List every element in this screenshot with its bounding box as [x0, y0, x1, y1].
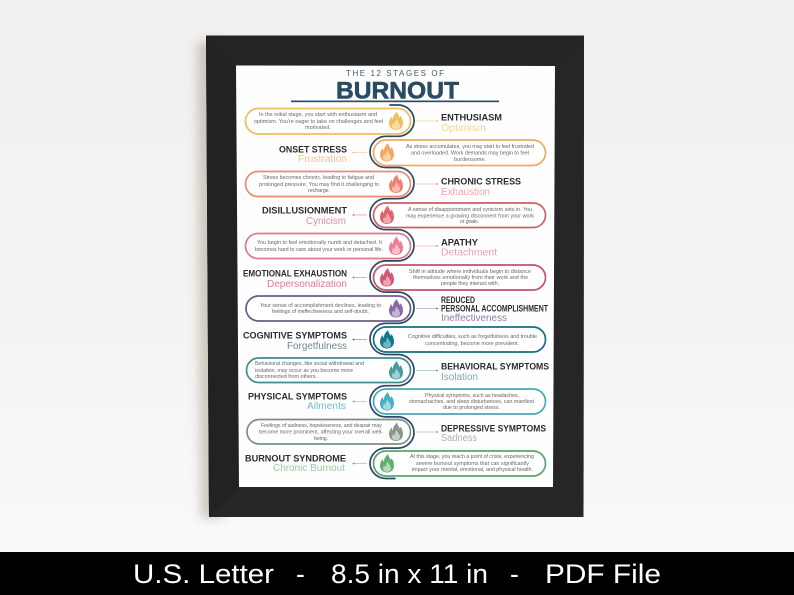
stage 4 pill: or goals.	[460, 219, 479, 225]
serpentine dark connector line	[370, 105, 414, 478]
banner text: dimensions: 8.5 in x 11 in	[331, 559, 488, 589]
stage 2 pill: and overloaded. Work demands may begin to feel	[411, 150, 529, 156]
label: onset stress	[279, 144, 347, 165]
stage 6 pill: themselves emotionally from their work and the	[413, 275, 528, 281]
frame shadow	[197, 42, 225, 518]
stage 5 pill	[246, 234, 410, 258]
stage 10 pill	[374, 389, 546, 414]
label: physical symptoms: Ailments	[307, 401, 346, 412]
stage 12 pill	[374, 451, 546, 476]
banner separator: -	[296, 559, 305, 589]
label: burnout syndrome: BURNOUT SYNDROME	[245, 453, 346, 463]
stage 1 pill: motivated.	[305, 125, 331, 131]
stage 5 pill: becomes hard to care about your work or personal life.	[255, 247, 383, 253]
label: burnout syndrome: Chronic Burnout	[273, 463, 345, 474]
stage 6 pill: people they interact with.	[441, 281, 499, 287]
label: chronic stress: CHRONIC STRESS	[441, 176, 521, 186]
stage 7 pill: feelings of ineffectiveness and self-doubt.	[272, 309, 369, 315]
stage 2 pill	[374, 140, 546, 166]
stage 5 pill: You begin to feel emotionally numb and detached. It	[257, 240, 382, 246]
stage 4 pill	[374, 203, 546, 228]
stage 9 pill: Behavioral changes, like social withdrawal and	[255, 361, 364, 367]
stage 7 pill	[246, 296, 410, 321]
stage 11 pill: become more prominent, affecting your overall well-	[259, 430, 383, 436]
label: enthusiasm	[441, 112, 502, 134]
black picture frame	[206, 36, 584, 517]
label: onset stress: Frustration	[298, 154, 347, 165]
label: physical symptoms: PHYSICAL SYMPTOMS	[248, 391, 347, 401]
stage 1 pill: optimism. You're eager to take on challenges and feel	[254, 119, 383, 125]
stage 12 pill: impact your mental, emotional, and physical health.	[412, 467, 533, 473]
stage 11 pill	[247, 420, 410, 444]
label: depressive symptoms: DEPRESSIVE SYMPTOMS	[441, 423, 546, 433]
label: reduced personal accomplishment: PERSONAL ACCOMPLISHMENT	[441, 304, 548, 314]
poster sheet	[236, 66, 555, 487]
stage 6 pill: Shift in attitude where individuals begin to distance	[409, 269, 531, 275]
stage 8 pill: concentrating, become more prevalent.	[425, 341, 519, 347]
title	[291, 69, 499, 104]
stage 9 pill	[246, 358, 410, 382]
label: enthusiasm: ENTHUSIASM	[441, 112, 502, 122]
label: burnout syndrome	[245, 453, 346, 474]
stage 2 pill: As stress accumulates, you may start to feel frustrated	[406, 144, 534, 150]
stage 10 pill: stomachaches, and sleep disturbances, can manifest	[409, 399, 534, 405]
label: emotional exhaustion: Depersonalization	[267, 279, 347, 290]
stage 1 pill	[246, 108, 410, 134]
title word: burnout: BURNOUT	[336, 78, 459, 104]
label: onset stress: ONSET STRESS	[279, 144, 347, 154]
banner text: file type: PDF File	[545, 559, 661, 589]
stage 9 pill: disconnected from others.	[255, 374, 317, 380]
stage 1 pill: In the initial stage, you start with enthusiasm and	[259, 112, 377, 118]
label: disillusionment: DISILLUSIONMENT	[262, 205, 348, 215]
label: reduced personal accomplishment: Ineffectiveness	[441, 313, 507, 324]
label: cognitive symptoms	[243, 330, 347, 352]
stage labels	[243, 112, 549, 474]
stage 11 pill: being.	[314, 436, 328, 442]
label: depressive symptoms: Sadness	[441, 433, 477, 444]
stage 3 pill	[246, 172, 410, 196]
stage 12 pill: severe burnout symptoms that can significantly	[416, 461, 529, 467]
stage 11 pill: Feelings of sadness, hopelessness, and despair may	[261, 423, 382, 429]
label: disillusionment	[262, 205, 348, 227]
stage 2 pill: burdensome.	[454, 157, 486, 163]
banner separator: -	[510, 559, 519, 589]
stage 6 pill	[374, 265, 546, 290]
label: cognitive symptoms: Forgetfulness	[287, 341, 347, 352]
label: emotional exhaustion: EMOTIONAL EXHAUSTION	[243, 268, 347, 278]
label: enthusiasm: Optimism	[441, 123, 486, 134]
label: behavioral symptoms: Isolation	[441, 372, 478, 383]
stage 10 pill: due to prolonged stress.	[443, 405, 500, 411]
stage 12 pill: At this stage, you reach a point of crisis, experiencing	[410, 454, 534, 460]
connectors	[353, 120, 438, 464]
label: apathy: APATHY	[441, 237, 478, 247]
label: physical symptoms	[248, 391, 347, 412]
banner text: paper size: U.S. Letter	[133, 559, 274, 589]
label: reduced personal accomplishment: REDUCED	[441, 295, 475, 305]
stage 3 pill: Stress becomes chronic, leading to fatigue and	[263, 175, 374, 181]
label: reduced personal accomplishment	[441, 295, 548, 324]
stage 3 pill: prolonged pressure. You may find it challenging to	[259, 182, 379, 188]
bottom black banner	[0, 552, 794, 595]
label: cognitive symptoms: COGNITIVE SYMPTOMS	[243, 330, 347, 340]
stage 10 pill: Physical symptoms, such as headaches,	[425, 393, 520, 399]
label: chronic stress: Exhaustion	[441, 187, 490, 198]
stage 8 pill	[374, 327, 546, 352]
label: disillusionment: Cynicism	[306, 216, 346, 227]
label: behavioral symptoms: BEHAVIORAL SYMPTOMS	[441, 361, 549, 371]
stage 4 pill: A sense of disappointment and cynicism sets in. You	[408, 207, 532, 213]
label: behavioral symptoms	[441, 361, 549, 383]
label: apathy	[441, 237, 497, 258]
title underline	[291, 100, 499, 102]
stage 3 pill: recharge.	[308, 188, 330, 194]
label: emotional exhaustion	[243, 268, 347, 290]
pills row 1-12	[246, 108, 546, 476]
stage 9 pill: isolation, may occur as you become more	[255, 368, 353, 374]
stage 8 pill: Cognitive difficulties, such as forgetfulness and trouble	[408, 334, 537, 340]
label: apathy: Detachment	[441, 248, 497, 258]
title line: the 12 stages of: THE 12 STAGES OF	[346, 69, 444, 78]
stage 4 pill: may experience a growing disconnect from your work	[406, 214, 534, 220]
label: depressive symptoms	[441, 423, 546, 444]
label: chronic stress	[441, 176, 521, 198]
stage 7 pill: Your sense of accomplishment declines, leading to	[260, 303, 381, 309]
